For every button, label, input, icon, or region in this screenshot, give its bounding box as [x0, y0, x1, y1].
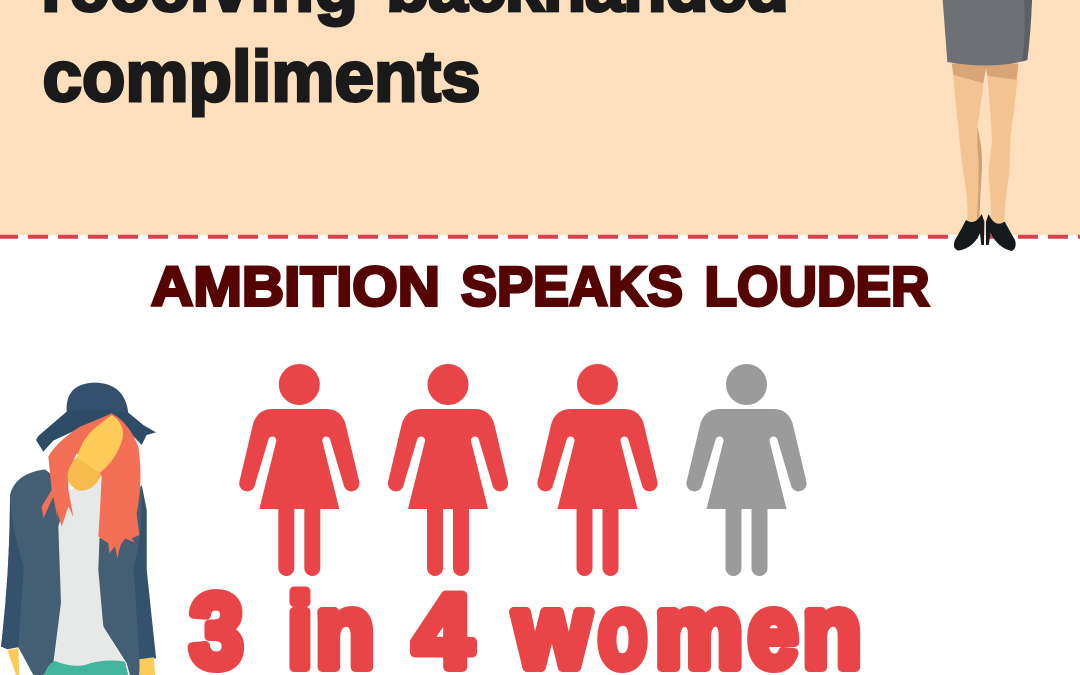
figure 4 (grey)	[686, 364, 807, 576]
heading	[151, 254, 930, 318]
dashed divider	[0, 235, 1080, 239]
statistic	[190, 574, 862, 675]
illustration: woman with hat	[1, 383, 156, 675]
title: compliments	[42, 38, 480, 117]
figure 2 (red)	[388, 364, 508, 576]
pictogram: 3 of 4 women	[239, 364, 807, 576]
heading: AMBITION	[151, 254, 440, 318]
heading: SPEAKS	[461, 254, 683, 318]
title	[41, 0, 789, 117]
figure 3 (red)	[537, 364, 658, 576]
figure 1 (red)	[239, 364, 359, 576]
illustration: businesswoman legs and skirt	[943, 0, 1032, 251]
heading: LOUDER	[704, 254, 930, 318]
